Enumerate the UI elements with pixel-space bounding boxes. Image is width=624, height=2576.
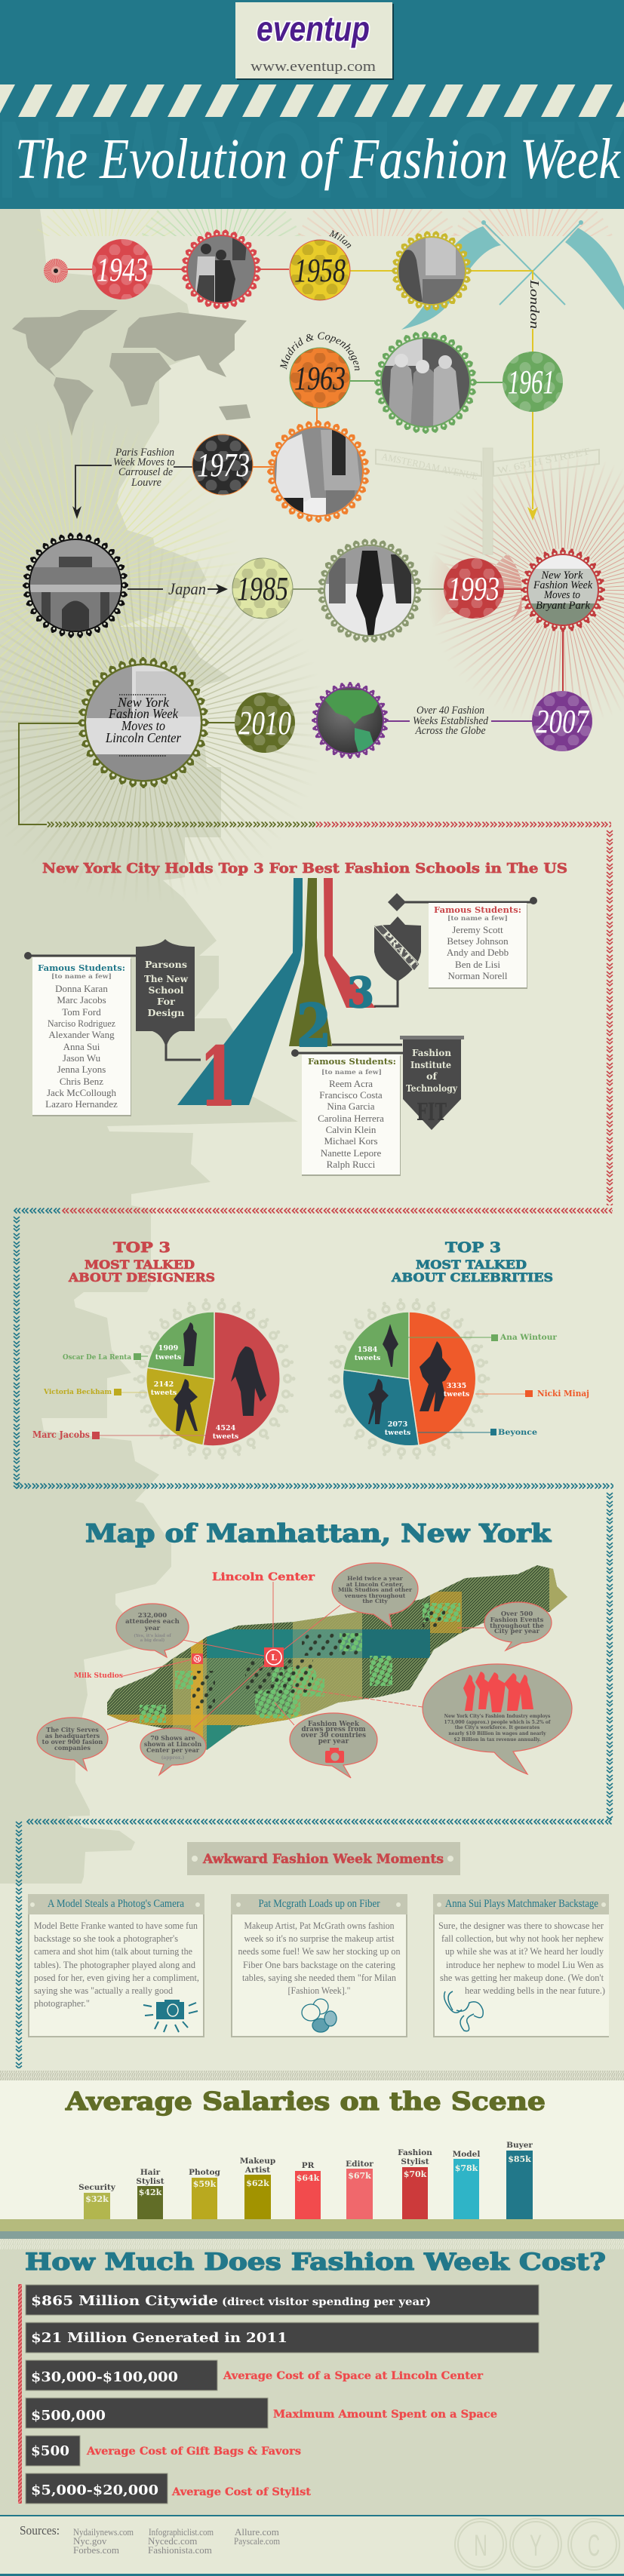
callout: industry employment: 173,000 (approx.) people which is 5.2% of <box>444 1720 551 1725</box>
photo Lincoln Center: Fashion Week <box>108 706 179 721</box>
arrowheads <box>72 506 538 594</box>
card: FIT famous students: Calvin Klein <box>326 1124 377 1135</box>
rank numbers: 3 <box>347 968 374 1017</box>
world map <box>12 310 251 436</box>
card: FIT famous students: Reem Acra <box>329 1078 373 1089</box>
card: Parsons famous students: [to name a few] <box>51 972 112 980</box>
accent strip <box>18 2284 22 2504</box>
cost bar: 21 million: $21 Million Generated in 2011 <box>31 2330 287 2346</box>
callout: 232,000 attendees: (Yes, it's kind of <box>134 1633 171 1638</box>
bar chart: salaries: Artist <box>244 2166 270 2175</box>
rank numbers <box>200 968 374 1125</box>
card: Parsons famous students: Chris Benz <box>60 1076 103 1087</box>
Paris Fashion Week label: Louvre <box>131 477 161 489</box>
heading: most talked about celebrities: MOST TALKED <box>416 1257 527 1272</box>
card: model steals camera <box>28 1894 204 2037</box>
callout: industry employment: New York City's Fashion Industry employs <box>444 1714 551 1719</box>
year 1985 <box>232 558 293 619</box>
year 2010: 2010 <box>238 705 291 741</box>
cost bar: gift bags <box>26 2436 301 2466</box>
pie: celebrities <box>330 1300 525 1458</box>
pie: celebrities: 2073 <box>388 1420 407 1429</box>
card: Pat Mcgrath <box>231 1894 407 2037</box>
year 1963 with Madrid and Copenhagen: 1963 <box>294 360 346 397</box>
callout: Over 500 events: throughout the <box>490 1622 544 1629</box>
NYC stamps: Y <box>530 2529 542 2562</box>
callout: industry employment: nearly $10 Billion in wages and nearly <box>448 1731 546 1736</box>
card: Parsons famous students: Jenna Lyons <box>57 1064 106 1075</box>
Over 40 Fashion Weeks label: Across the Globe <box>415 725 486 737</box>
pie: celebrities: tweets <box>444 1390 469 1399</box>
sources: Forbes.com <box>73 2544 119 2556</box>
rank numbers: 1 <box>200 1030 236 1125</box>
pie: celebrities: 3335 <box>447 1382 466 1390</box>
logo card: eventup <box>257 9 370 48</box>
pie labels: designers: Marc Jacobs <box>32 1429 90 1440</box>
Over 40 Fashion Weeks label: Over 40 Fashion <box>417 705 484 717</box>
bar chart: salaries: Photog <box>189 2168 221 2177</box>
bar chart: salaries: Makeup <box>240 2157 275 2166</box>
pie: designers: tweets <box>151 1389 177 1397</box>
callout: 70 shows <box>140 1728 206 1775</box>
card: model steals camera: backstage so she took a photographer's <box>34 1933 178 1944</box>
bar chart: salaries: $70k <box>404 2169 427 2179</box>
card: FIT famous students <box>302 1055 401 1176</box>
year 1958 with Milan <box>290 230 352 300</box>
Over 40 Fashion Weeks label <box>413 705 488 737</box>
year 2007 <box>532 691 592 751</box>
year 2007: 2007 <box>536 703 590 740</box>
card: Pat Mcgrath: Pat Mcgrath Loads up on Fiber <box>258 1898 380 1910</box>
card: FIT famous students: Nina Garcia <box>327 1101 375 1112</box>
photo 1980s runway <box>319 540 420 641</box>
Parsons banner: School <box>148 985 184 996</box>
pie labels: celebrities: Beyonce <box>498 1428 537 1437</box>
card: Anna Sui: fall collection, but why not hook her nephew <box>441 1933 604 1944</box>
Paris Fashion Week label <box>113 447 175 489</box>
photo Bryant Park: Moves to <box>543 589 580 601</box>
card: Pratt famous students: Betsey Johnson <box>447 935 509 947</box>
Manhattan map <box>107 1565 567 1750</box>
cost bar: stylist: Average Cost of Stylist <box>171 2486 312 2498</box>
NYC stamps <box>455 2519 619 2570</box>
bar chart: salaries: Model <box>453 2150 480 2159</box>
year 1963 with Madrid and Copenhagen: Madrid & Copenhagen <box>280 332 359 371</box>
photo 1940s fashion sketch <box>183 231 260 308</box>
card: Pat Mcgrath: tables, saying she needed them "for Milan <box>242 1972 396 1983</box>
pie: designers: 4524 <box>216 1424 236 1432</box>
cost bar: gift bags: $500 <box>31 2443 69 2459</box>
callout: 70 shows: shown at Lincoln <box>144 1740 201 1748</box>
map connector lines <box>107 1582 484 1730</box>
callout: Held twice a year: Milk Studios and other <box>338 1586 413 1593</box>
divider: hatch band <box>0 2071 624 2080</box>
divider: hatch band lower <box>0 2239 624 2249</box>
callout: headquarters: to over 900 fasion <box>42 1738 103 1745</box>
street sign backdrop: AMSTERDAM AVENUE <box>380 450 479 482</box>
card: Parsons famous students: Famous Students: <box>38 963 125 973</box>
Lincoln Center marker <box>212 1571 315 1667</box>
cost bar: 21 million <box>26 2323 539 2353</box>
sources: Nycedc.com <box>148 2535 197 2547</box>
Milk Studios marker: Milk Studios <box>74 1672 123 1680</box>
card: FIT famous students: [to name a few] <box>321 1068 382 1076</box>
card: Pratt famous students: Jeremy Scott <box>452 924 503 935</box>
cost bar: stylist <box>26 2473 312 2504</box>
heading: cost: How Much Does Fashion Week Cost? <box>25 2249 606 2276</box>
section: salaries background <box>0 2080 624 2219</box>
callout: Held twice a year: venues throughout <box>344 1592 406 1599</box>
globe photo <box>313 683 387 757</box>
sources <box>20 2523 280 2556</box>
card: Pratt famous students: [to name a few] <box>447 914 508 922</box>
photo Carrousel du Louvre <box>24 534 127 637</box>
callout: headquarters: as headquarters <box>45 1732 100 1739</box>
callout: 70 shows: 70 Shows are <box>150 1734 195 1742</box>
callout: 232,000 attendees: 232,000 <box>138 1612 167 1620</box>
photo Lincoln Center: Moves to <box>121 718 165 733</box>
card: model steals camera: posed for her, even giving her a compliment, <box>34 1972 199 1983</box>
logo card <box>235 2 394 80</box>
cost bar: 865 million <box>26 2285 539 2315</box>
card: Parsons famous students: Marc Jacobs <box>57 994 106 1006</box>
pie: designers: tweets <box>155 1353 181 1362</box>
card: Parsons famous students: Alexander Wang <box>48 1029 115 1040</box>
card: Anna Sui <box>433 1894 609 2037</box>
bar chart: salaries: Buyer <box>506 2141 533 2150</box>
year 1963 with Madrid and Copenhagen <box>280 332 359 409</box>
callout: Held twice a year: at Lincoln Center, <box>346 1581 404 1588</box>
card: model steals camera: saying she was "actually a really good <box>34 1985 173 1996</box>
card: model steals camera: A Model Steals a Photog's Camera <box>48 1898 184 1910</box>
Lincoln Center marker: L <box>271 1653 277 1663</box>
year 1958 with Milan: 1958 <box>294 252 346 289</box>
year 1943 <box>92 239 152 299</box>
connectors to banners <box>166 979 402 1060</box>
year 1961: 1961 <box>508 364 555 401</box>
card: model steals camera: photographer." <box>34 1997 90 2009</box>
bar chart: salaries: $78k <box>455 2163 478 2173</box>
photo Lincoln Center: Lincoln Center <box>105 730 182 745</box>
Parsons banner <box>24 939 195 1049</box>
card: FIT famous students: Famous Students: <box>308 1056 396 1067</box>
card: Parsons famous students: Lazaro Hernandez <box>45 1098 118 1110</box>
callout: Over 500 events: Over 500 <box>501 1610 533 1617</box>
bar chart: salaries: $59k <box>193 2179 217 2189</box>
callout: press from 30 countries <box>290 1713 377 1778</box>
bar chart: salaries: $64k <box>297 2173 320 2183</box>
sources: Fashionista.com <box>148 2544 212 2556</box>
card: Parsons famous students: Donna Karan <box>55 983 108 994</box>
card: Parsons famous students: Narciso Rodriguez <box>48 1018 115 1029</box>
card: Pratt famous students: Andy and Debb <box>447 947 509 958</box>
cost bar: Lincoln Center space: $30,000-$100,000 <box>31 2369 178 2385</box>
callout: Held twice a year: Held twice a year <box>347 1575 404 1582</box>
pie: designers: 1909 <box>158 1344 179 1352</box>
bar chart: salaries: $32k <box>85 2194 109 2204</box>
heading: most talked about celebrities: TOP 3 <box>445 1239 501 1256</box>
callout: press from 30 countries: over 30 countries <box>301 1732 366 1739</box>
callout: press from 30 countries: draws press from <box>301 1726 366 1733</box>
pie labels: designers: Victoria Beckham <box>43 1388 112 1396</box>
pie labels: designers <box>32 1353 141 1440</box>
bar chart: salaries: $67k <box>348 2171 371 2181</box>
bar chart: salaries: Editor <box>346 2160 373 2169</box>
heading: average salaries: Average Salaries on the Scene <box>65 2086 546 2116</box>
pie labels: celebrities: Nicki Minaj <box>537 1389 589 1399</box>
photo Lincoln Center <box>79 659 207 787</box>
bar chart: salaries: Fashion <box>398 2148 432 2157</box>
cost bar: maximum space: Maximum Amount Spent on a Space <box>273 2409 497 2421</box>
pie: celebrities: tweets <box>385 1429 410 1437</box>
heading: map of Manhattan: Map of Manhattan, New York <box>85 1518 552 1548</box>
cost bar: 865 million: $865 Million Citywide <box>31 2293 218 2309</box>
pie labels: designers: Oscar De La Renta <box>63 1353 131 1362</box>
sources: Allure.com <box>235 2526 279 2538</box>
FIT banner: Fashion <box>412 1048 451 1058</box>
Pratt shield <box>374 893 537 981</box>
card: Pat Mcgrath: [Fashion Week]." <box>288 1985 350 1996</box>
card: FIT famous students: Ralph Rucci <box>327 1159 376 1170</box>
card: Pat Mcgrath: Makeup Artist, Pat McGrath owns fashion <box>244 1920 395 1931</box>
callout: industry employment <box>423 1664 572 1774</box>
sources: Nydailynews.com <box>73 2526 134 2538</box>
timeline connectors <box>19 269 563 824</box>
pie: celebrities: 1584 <box>358 1346 378 1354</box>
card: model steals camera: camera and shot him (talk about turning the <box>34 1945 192 1957</box>
heading: most talked about designers: ABOUT DESIGNERS <box>68 1270 215 1285</box>
cost bar: Lincoln Center space <box>26 2360 484 2390</box>
callout: 70 shows: (approx.) <box>161 1755 185 1761</box>
banner: awkward moments: Awkward Fashion Week Moments <box>202 1852 444 1867</box>
Milk Studios marker <box>74 1653 203 1680</box>
Paris Fashion Week label: Paris Fashion <box>115 447 174 459</box>
callout: 232,000 attendees: attendees each <box>125 1618 180 1626</box>
bar chart: salaries: $85k <box>508 2154 531 2164</box>
callout: Over 500 events <box>484 1602 552 1650</box>
card: Anna Sui: she was getting her makeup done. (We don't <box>440 1972 604 1983</box>
rank numbers: 2 <box>297 992 331 1061</box>
ranking ribbons <box>177 878 376 1105</box>
card: Parsons famous students <box>32 957 131 1116</box>
pie labels: celebrities <box>490 1333 589 1437</box>
card: Anna Sui: Sure, the designer was there to showcase her <box>438 1920 604 1931</box>
FIT banner <box>291 1036 464 1130</box>
pie: designers: tweets <box>213 1432 238 1441</box>
Pratt shield: PRATT <box>380 929 420 970</box>
callout: 232,000 attendees: a big deal) <box>140 1638 165 1643</box>
photo 1950s newspaper <box>393 232 470 309</box>
sources: Nyc.gov <box>73 2535 107 2547</box>
Over 40 Fashion Weeks label: Weeks Established <box>413 715 488 727</box>
Japan label: Japan <box>168 579 206 598</box>
callout: Held twice a year <box>332 1563 418 1627</box>
card: Parsons famous students: Tom Ford <box>62 1006 101 1018</box>
NYC stamps: C <box>588 2529 600 2562</box>
card: Pratt famous students: Famous Students: <box>434 904 521 915</box>
FIT banner: Institute <box>410 1060 451 1070</box>
card: Parsons famous students: Anna Sui <box>63 1041 100 1052</box>
year 1993 <box>444 558 504 619</box>
Milk Studios marker: M <box>195 1657 200 1663</box>
year 2010 <box>235 692 295 753</box>
year 1961 <box>503 352 563 412</box>
photo Bryant Park: Fashion Week <box>533 579 592 591</box>
card: FIT famous students: Carolina Herrera <box>318 1113 384 1124</box>
Paris Fashion Week label: Carrousel de <box>118 466 173 478</box>
Parsons banner: Parsons <box>145 959 187 970</box>
Parsons banner: For <box>157 996 176 1007</box>
year 1973: 1973 <box>197 447 250 484</box>
callout: 232,000 attendees: year <box>144 1625 161 1632</box>
bar chart: salaries: Stylist <box>401 2157 429 2166</box>
Lincoln Center marker: Lincoln Center <box>212 1571 315 1583</box>
heading: most talked about celebrities <box>391 1239 553 1285</box>
card: Anna Sui: up while she was at it? We heard her loudly <box>445 1945 604 1957</box>
card: Parsons famous students: Jason Wu <box>63 1052 101 1064</box>
pie: designers: 2142 <box>154 1380 174 1389</box>
bar chart: salaries: PR <box>302 2161 315 2170</box>
card: Anna Sui: Anna Sui Plays Matchmaker Backstage <box>445 1898 598 1910</box>
callout: headquarters: companies <box>54 1744 91 1752</box>
card: Pratt famous students <box>429 903 527 989</box>
card: model steals camera: Model Bette Franke wanted to have some fun <box>34 1920 198 1931</box>
callout: 232,000 attendees <box>116 1604 189 1657</box>
flags: crossed London pennants <box>401 220 624 330</box>
footer rules <box>0 2515 624 2576</box>
London label: London <box>527 279 542 329</box>
card: FIT famous students: Francisco Costa <box>319 1089 383 1101</box>
photo Bryant Park: New York <box>541 570 583 582</box>
card: Pratt famous students: Ben de Lisi <box>455 959 500 970</box>
Parsons banner: The New <box>144 974 189 984</box>
card: FIT famous students: Michael Kors <box>324 1135 378 1147</box>
pie: designers <box>100 1300 294 1458</box>
cost bar: maximum space: $500,000 <box>31 2408 106 2424</box>
Paris Fashion Week label: Week Moves to <box>113 456 175 468</box>
card: Pat Mcgrath: needs some fuel! We saw her stocking up on <box>238 1945 401 1957</box>
callout: press from 30 countries: per year <box>318 1738 349 1745</box>
ground bands <box>0 2219 624 2239</box>
callout: Held twice a year: the City <box>362 1598 388 1604</box>
logo card: www.eventup.com <box>251 59 376 75</box>
cost bar: 865 million: (direct visitor spending per year) <box>222 2296 431 2308</box>
year 1985: 1985 <box>237 570 288 607</box>
FIT banner: Technology <box>406 1083 458 1094</box>
NYC stamps: N <box>474 2529 487 2562</box>
bar chart: salaries: Stylist <box>136 2177 164 2186</box>
heading: most talked about designers: MOST TALKED <box>85 1257 195 1272</box>
heading: most talked about designers <box>68 1239 215 1285</box>
FIT banner: FIT <box>417 1098 447 1126</box>
photo Bryant Park <box>522 549 604 631</box>
cost bar: gift bags: Average Cost of Gift Bags & Favors <box>86 2446 301 2458</box>
city skyline silhouette <box>0 209 298 1884</box>
year 1943: 1943 <box>97 251 148 288</box>
street sign backdrop: W. 65TH STREET <box>496 445 591 476</box>
bar chart: salaries <box>78 2141 533 2219</box>
year 1973 <box>192 434 253 495</box>
card: model steals camera: tables). The photographer played along and <box>34 1959 195 1970</box>
cost bar: Lincoln Center space: Average Cost of a Space at Lincoln Center <box>223 2370 484 2382</box>
photo 1970s two suits <box>269 422 368 521</box>
pie labels: celebrities: Ana Wintour <box>500 1333 557 1342</box>
photo 1960s three women <box>376 333 475 432</box>
sunburst rays <box>0 216 624 846</box>
card: Anna Sui: introduce her nephew to model Liu Wen as <box>446 1959 604 1970</box>
cost bar: stylist: $5,000-$20,000 <box>31 2482 158 2498</box>
callout: headquarters: The City Serves <box>46 1726 99 1733</box>
sources: Payscale.com <box>234 2535 280 2547</box>
banner: awkward moments <box>187 1842 460 1875</box>
card: Parsons famous students: Jack McCollough <box>47 1087 117 1098</box>
sources: Infographiclist.com <box>149 2526 214 2538</box>
callout: headquarters <box>37 1718 108 1770</box>
callout: Over 500 events: City per year <box>494 1627 540 1635</box>
card: Pat Mcgrath: week so it's no surprise the makeup artist <box>244 1933 395 1944</box>
callout: 70 shows: Center per year <box>146 1746 200 1754</box>
year 1958 with Milan: Milan <box>329 230 352 249</box>
card: Anna Sui: hear wedding bells in the near future.) <box>465 1985 605 1996</box>
bar chart: salaries: Hair <box>140 2168 161 2177</box>
card: FIT famous students: Nanette Lepore <box>321 1147 381 1159</box>
card: Pat Mcgrath: Fiber One bars backstage on the catering <box>243 1959 395 1970</box>
heading: most talked about celebrities: ABOUT CELEBRITIES <box>391 1270 553 1285</box>
callout: industry employment: the City's workforce. It generates <box>455 1725 540 1730</box>
photo Lincoln Center: New York <box>117 695 170 710</box>
start marker <box>44 259 68 283</box>
callout: press from 30 countries: Fashion Week <box>308 1721 360 1728</box>
bar chart: salaries: $42k <box>139 2188 162 2197</box>
bar chart: salaries: $62k <box>246 2178 269 2188</box>
section: cost background <box>0 2239 624 2516</box>
heading: fashion schools: New York City Holds Top 3 For Best Fashion Schools in The US <box>42 861 567 877</box>
header band <box>0 0 624 221</box>
callout: Over 500 events: Fashion Events <box>490 1616 544 1623</box>
FIT banner: of <box>426 1071 438 1082</box>
arrow border rows <box>13 821 613 2068</box>
heading: most talked about designers: TOP 3 <box>113 1239 171 1256</box>
photo Bryant Park: Bryant Park <box>536 600 590 612</box>
street sign backdrop <box>376 445 599 554</box>
Parsons banner: Design <box>148 1008 185 1018</box>
sources: Sources: <box>20 2523 60 2538</box>
callout: industry employment: $2 Billion in tax revenue annually. <box>453 1737 541 1742</box>
year 1993: 1993 <box>448 570 500 607</box>
card: Pratt famous students: Norman Norell <box>447 970 508 981</box>
pie: celebrities: tweets <box>355 1354 380 1362</box>
bar chart: salaries: Security <box>78 2183 116 2192</box>
cost bar: maximum space <box>26 2398 497 2428</box>
